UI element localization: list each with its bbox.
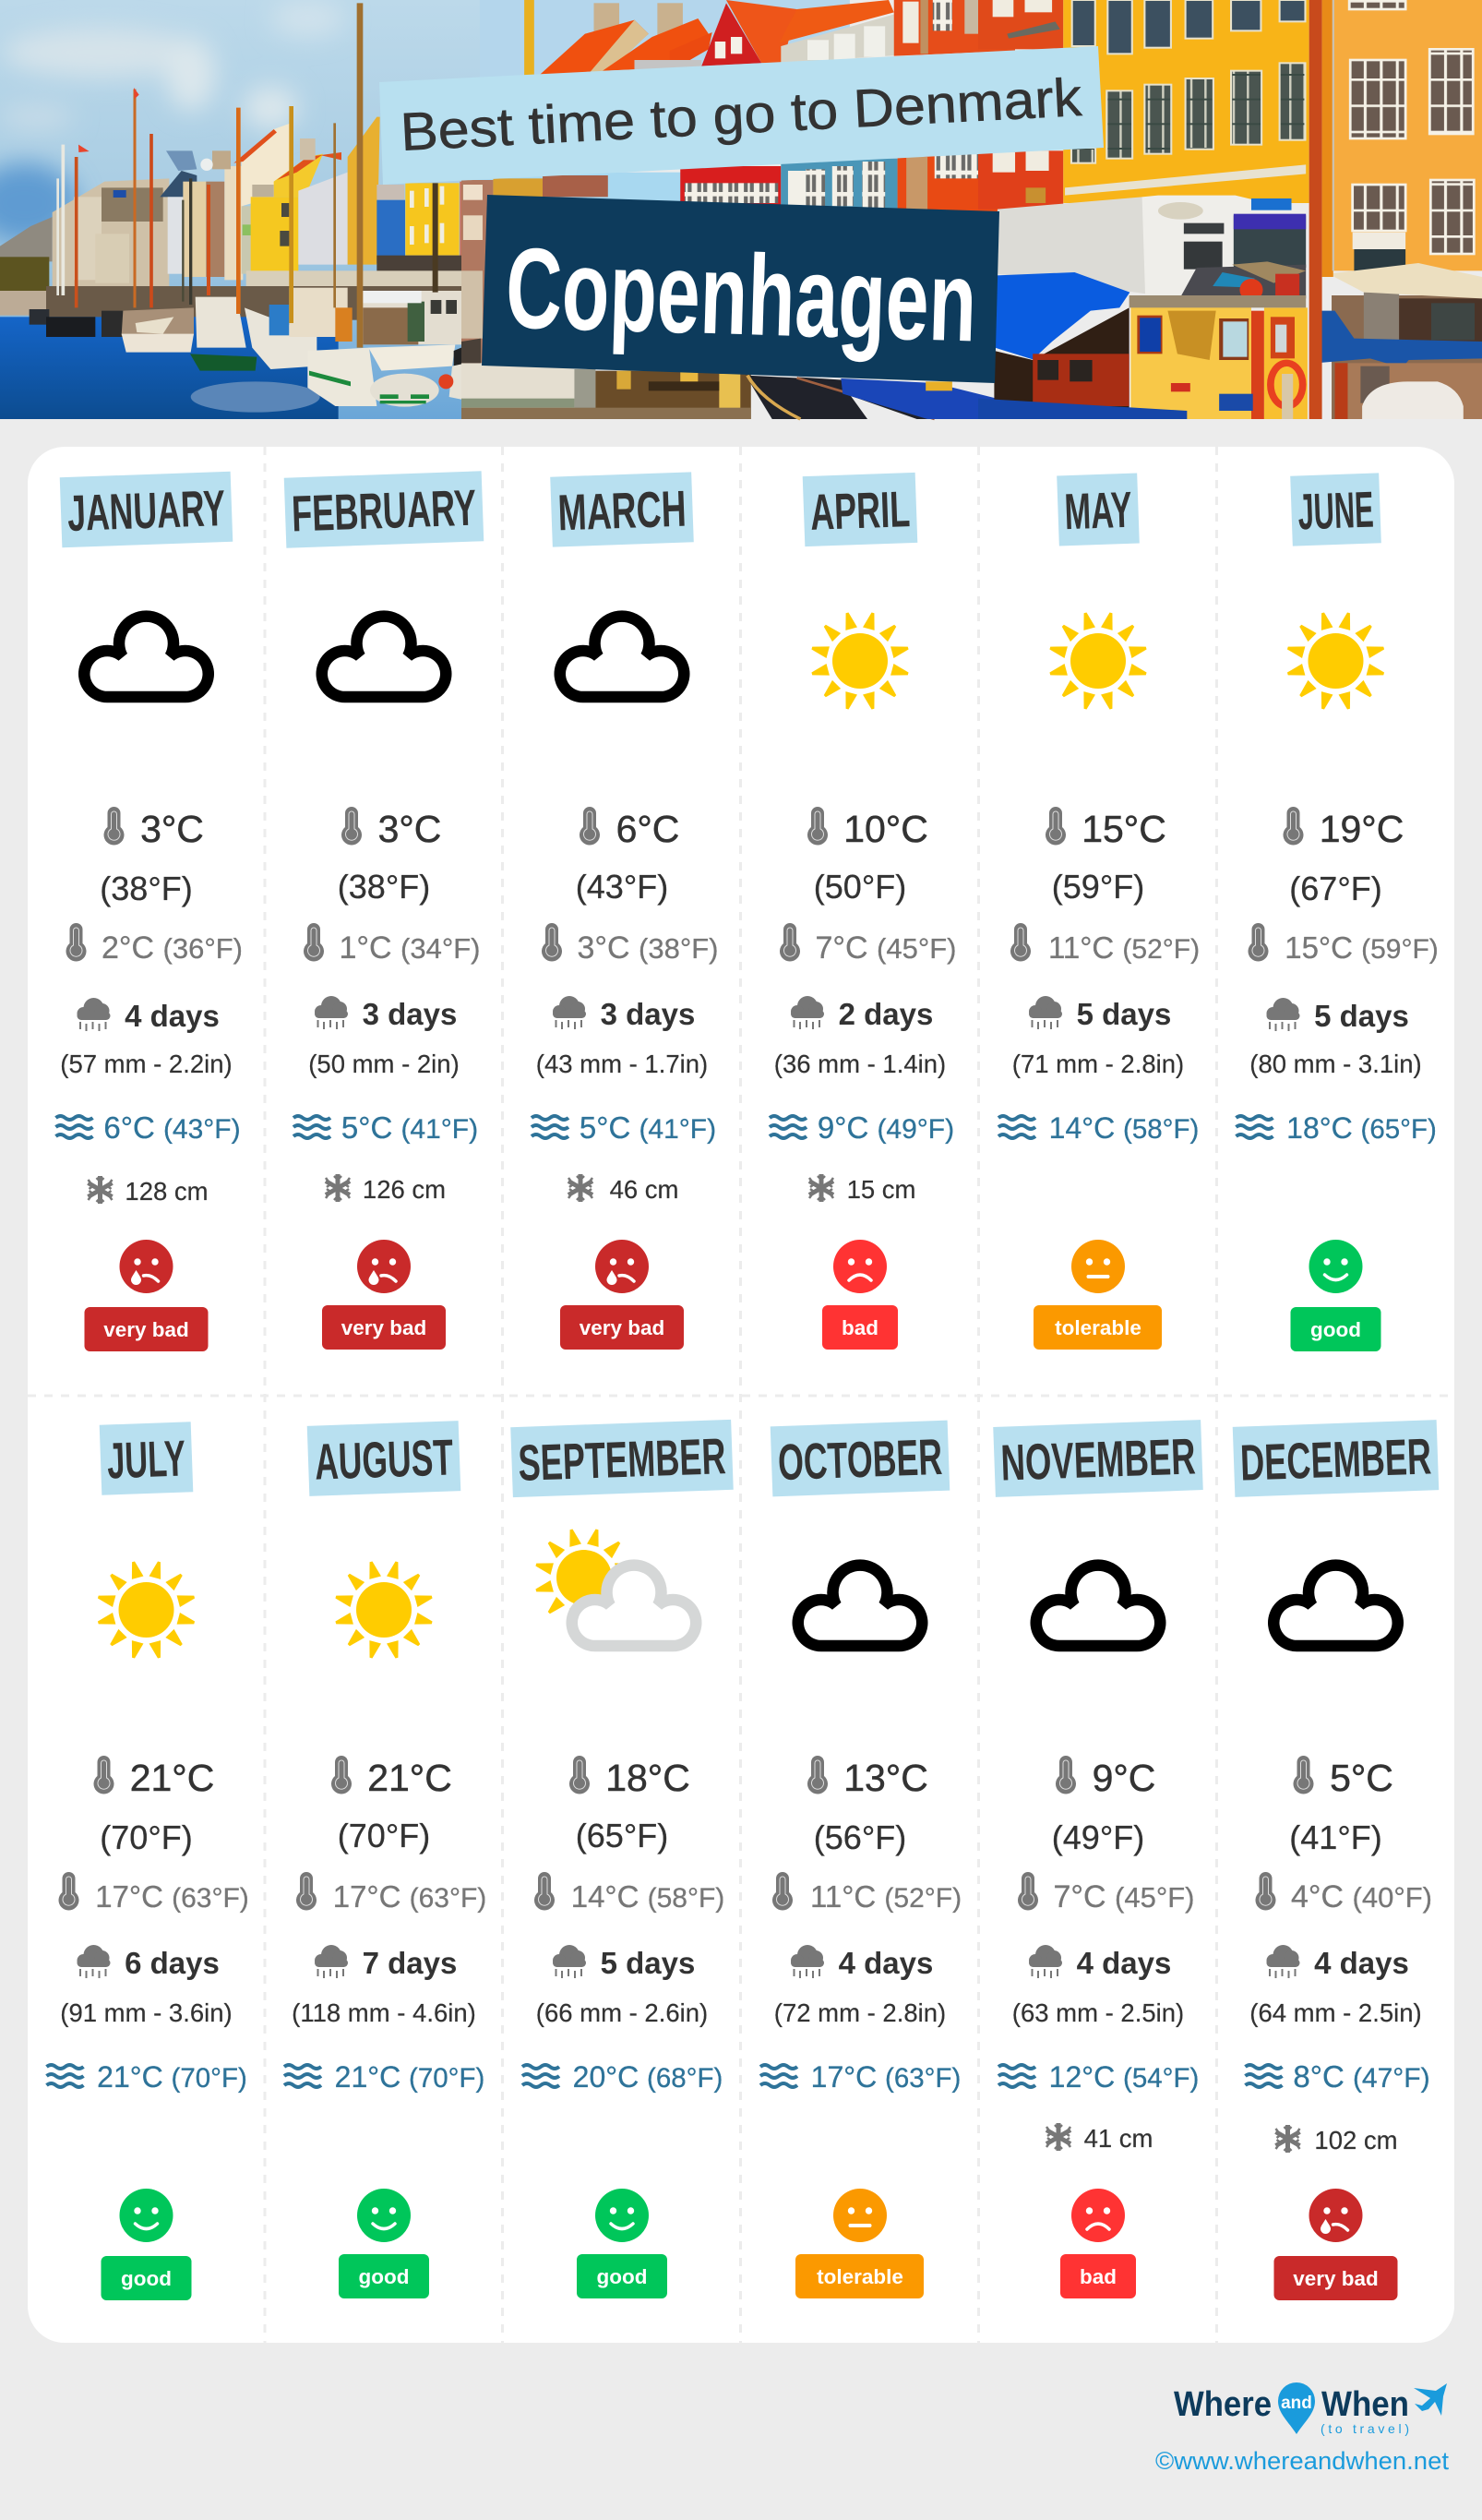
icon: cloudy [84,617,209,697]
icon: airplane [1414,2383,1447,2416]
sea temperature: 9°C (49°F) [818,1110,954,1145]
rating label [822,1305,898,1350]
low temperature [296,1872,486,1914]
high temperature [1052,1756,1155,1856]
rating label: good [359,2265,409,2288]
month label: JANUARY [66,479,226,542]
logo: Where and When: Where [1174,2385,1272,2424]
high temperature: (65°F) [576,1817,668,1854]
rating label [795,2254,924,2298]
icon: sunny [1286,611,1385,711]
rainy days [315,1945,457,1980]
low temperature: 17°C (63°F) [95,1879,249,1914]
rating label: bad [1080,2265,1117,2288]
high temperature: 13°C [843,1757,928,1799]
panel: June [1237,473,1439,1351]
high temperature [807,1756,928,1856]
low temperature [1255,1872,1432,1914]
icon: cloudy [560,617,684,697]
sea temperature: 20°C (68°F) [573,2060,723,2094]
low temperature: 7°C (45°F) [1054,1879,1194,1914]
icon: cloudy [798,1566,922,1646]
high temperature: 18°C [605,1757,690,1799]
rainy days [1029,996,1171,1031]
high temperature [1283,807,1404,907]
snow depth: 128 cm [125,1177,209,1206]
icon: sunny [1048,611,1148,711]
header photo: Nyhavn harbour [0,0,1482,419]
rating label: tolerable [817,2265,903,2288]
precipitation: (43 mm - 1.7in) [536,1050,708,1078]
month label [284,471,484,548]
high temperature: 9°C [1093,1757,1155,1799]
rating label: tolerable [1055,1316,1141,1339]
month label: MARCH [556,480,687,541]
panel: February [284,471,484,1350]
rating label: good [1310,1318,1361,1341]
low temperature [1018,1872,1194,1914]
icon: cloudy [322,617,446,697]
panel: May [998,474,1200,1350]
low temperature: 7°C (45°F) [816,930,956,966]
panel: December [1233,1420,1439,2300]
low temperature: 17°C (63°F) [333,1879,486,1914]
precipitation: (57 mm - 2.2in) [60,1050,233,1078]
snow depth: 102 cm [1314,2126,1398,2154]
rainy days [553,1945,695,1980]
high temperature: 21°C [130,1757,214,1799]
high temperature: 21°C [367,1757,452,1799]
low temperature: 11°C (52°F) [810,1879,962,1914]
rating face [833,2189,887,2242]
month label: JUNE [1297,481,1375,540]
rainy days: 4 days [125,999,220,1033]
high temperature: 19°C [1320,808,1404,850]
snow depth [326,1174,446,1204]
rating label: very bad [341,1316,426,1339]
snow depth [568,1174,678,1204]
rainy days [791,996,933,1031]
high temperature: (38°F) [100,870,193,907]
banner: subtitle [379,46,1104,185]
rating label [560,1305,684,1350]
high temperature: (70°F) [338,1817,430,1854]
panel: monthly climate table [28,447,1454,2343]
low temperature [534,1872,724,1914]
rating face [357,2189,411,2242]
panel: March [532,472,718,1350]
sea temperature: 5°C (41°F) [341,1110,478,1145]
sea temperature: 12°C (54°F) [1049,2060,1199,2094]
rating label: bad [842,1316,878,1339]
sea temperature: 6°C (43°F) [103,1110,241,1145]
sea temperature: 21°C (70°F) [97,2060,247,2094]
high temperature: (70°F) [100,1818,193,1856]
rating face [1071,1240,1125,1293]
snow depth [89,1176,209,1206]
snow depth [809,1174,915,1204]
snow depth: 126 cm [363,1175,446,1204]
rainy days [315,996,457,1031]
low temperature [66,923,243,966]
panel: September [510,1420,734,2298]
rating label: good [121,2267,172,2290]
month label [550,472,694,547]
snow depth: 41 cm [1084,2124,1153,2153]
high temperature: (49°F) [1052,1818,1144,1856]
sea temperature: 5°C (41°F) [580,1110,716,1145]
low temperature [1010,923,1200,965]
rainy days [78,998,220,1033]
month label: SEPTEMBER [518,1427,727,1492]
low temperature [304,923,480,966]
low temperature: 3°C (38°F) [578,930,718,966]
low temperature: 14°C (58°F) [571,1879,724,1914]
rainy days: 4 days [839,1946,933,1980]
rainy days [1029,1945,1171,1980]
month label [1290,473,1381,546]
rating label [1034,1305,1162,1350]
panel: August [284,1421,486,2298]
high temperature: 15°C [1082,808,1166,850]
panel: November [993,1420,1203,2298]
icon: partly sunny [534,1528,696,1646]
snow depth: 46 cm [610,1175,678,1204]
rainy days [1266,1945,1409,1980]
rating face [120,1240,173,1293]
low temperature: 15°C (59°F) [1285,930,1439,965]
precipitation: (36 mm - 1.4in) [774,1050,946,1078]
high temperature [807,807,928,906]
precipitation: (91 mm - 3.6in) [60,1998,233,2027]
high temperature [576,807,679,906]
month label: JULY [106,1430,186,1489]
snow depth [1275,2125,1398,2154]
logo: Where and When [1174,2382,1447,2436]
icon: sunny [97,1560,196,1660]
precipitation: (50 mm - 2in) [308,1050,460,1078]
month label [510,1420,734,1497]
icon: sunny [810,611,910,711]
low temperature: 11°C (52°F) [1048,930,1200,965]
month label: MAY [1063,481,1133,540]
icon: cloudy [1273,1566,1398,1646]
high temperature [1046,807,1166,906]
precipitation: (118 mm - 4.6in) [292,1998,476,2027]
month label: AUGUST [314,1428,454,1491]
rating label [1060,2254,1136,2298]
high temperature: (38°F) [338,868,430,906]
panel: July [46,1422,249,2300]
low temperature [772,1872,962,1914]
high temperature [569,1756,690,1854]
rating label [102,2256,192,2300]
rating label [85,1307,209,1351]
banner: city title: Copenhagen [504,224,978,366]
sea temperature: 14°C (58°F) [1049,1111,1199,1145]
precipitation: (66 mm - 2.6in) [536,1998,708,2027]
high temperature: (59°F) [1052,868,1144,906]
high temperature: 5°C [1330,1757,1393,1799]
rating face [595,1240,649,1293]
rainy days [791,1945,933,1980]
low temperature [1248,923,1439,965]
high temperature [338,807,441,906]
rainy days [553,996,695,1031]
rating face [595,2189,649,2242]
precipitation: (64 mm - 2.5in) [1249,1998,1422,2027]
sea temperature: 8°C (47°F) [1293,2059,1430,2094]
rainy days: 7 days [363,1946,457,1980]
rainy days: 3 days [363,997,457,1031]
high temperature [1289,1756,1393,1856]
month label [803,473,917,546]
icon: cloudy [1036,1566,1160,1646]
low temperature: 1°C (34°F) [340,930,480,966]
month label [1057,474,1140,546]
rating label: very bad [580,1316,664,1339]
rating face [357,1240,411,1293]
precipitation: (71 mm - 2.8in) [1012,1050,1184,1078]
rainy days: 5 days [1314,999,1409,1033]
month label [60,472,233,547]
rainy days: 6 days [125,1946,220,1980]
low temperature: 4°C (40°F) [1291,1879,1432,1914]
sea temperature: 17°C (63°F) [811,2060,961,2094]
rating label: good [597,2265,647,2288]
icon: map pin [1278,2382,1315,2434]
high temperature: 10°C [843,808,928,850]
rainy days [78,1945,220,1980]
sea temperature: 18°C (65°F) [1286,1111,1437,1145]
month label: OCTOBER [777,1428,943,1491]
snow depth: 15 cm [847,1175,915,1204]
rainy days [1266,998,1409,1033]
low temperature [780,923,956,966]
month label: APRIL [809,480,911,541]
rating face [833,1240,887,1293]
rainy days: 5 days [601,1946,695,1980]
icon: sunny [334,1560,434,1660]
snow depth [1046,2123,1153,2153]
logo: Where and When: (to travel) [1321,2421,1409,2436]
high temperature: (50°F) [814,868,906,906]
rainy days: 4 days [1314,1946,1409,1980]
rainy days: 4 days [1077,1946,1171,1980]
rating label [577,2254,667,2298]
high temperature: (43°F) [576,868,668,906]
banner: subtitle: Best time to go to Denmark [399,67,1084,162]
panel: April [770,473,956,1350]
high temperature [100,807,204,907]
rating face [1309,2189,1362,2242]
low temperature [59,1872,249,1914]
logo: Where and When: When [1321,2385,1409,2424]
panel: January [55,472,243,1351]
month label [771,1421,950,1496]
rainy days: 5 days [1077,997,1171,1031]
low temperature [542,923,718,966]
rainy days: 3 days [601,997,695,1031]
panel: October [760,1421,962,2298]
precipitation: (72 mm - 2.8in) [774,1998,946,2027]
rating label: very bad [1293,2267,1379,2290]
high temperature [331,1756,452,1854]
rating label [322,1305,446,1350]
high temperature: 6°C [616,808,679,850]
month label [993,1420,1203,1497]
high temperature: (41°F) [1289,1818,1382,1856]
copyright url: ©www.whereandwhen.net [1155,2447,1449,2475]
rating face [120,2189,173,2242]
precipitation: (80 mm - 3.1in) [1249,1050,1422,1078]
icon: map pin: and [1281,2394,1312,2413]
high temperature [94,1756,214,1856]
month label [307,1421,460,1496]
rating label [1273,2256,1397,2300]
banner: city title [482,195,999,383]
rating label: very bad [103,1318,189,1341]
high temperature: 3°C [378,808,441,850]
rating face [1071,2189,1125,2242]
rating label [339,2254,429,2298]
high temperature: (56°F) [814,1818,906,1856]
month label [100,1422,193,1495]
rating label [1290,1307,1380,1351]
month label: FEBRUARY [291,479,477,542]
month label: NOVEMBER [1000,1427,1197,1492]
low temperature: 2°C (36°F) [102,930,243,966]
high temperature: 3°C [140,808,204,850]
rating face [1309,1240,1362,1293]
sea temperature: 21°C (70°F) [335,2060,484,2094]
high temperature: (67°F) [1289,870,1382,907]
rainy days: 2 days [839,997,933,1031]
precipitation: (63 mm - 2.5in) [1012,1998,1184,2027]
